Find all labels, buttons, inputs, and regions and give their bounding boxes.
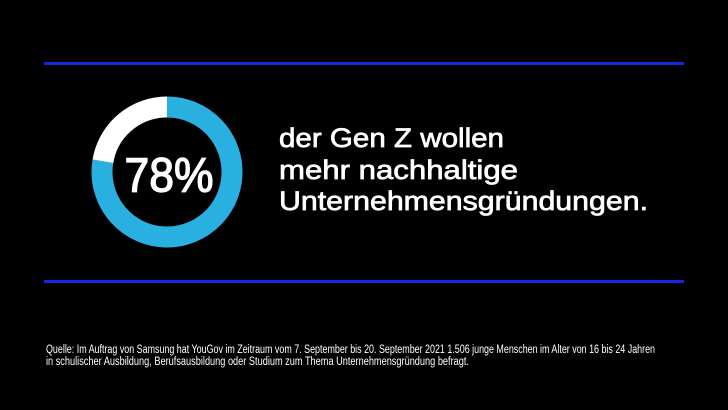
- donut chart: 78%: [102, 107, 232, 237]
- top blue rule: [44, 62, 684, 65]
- headline line 3: Unternehmensgründungen.: [279, 186, 648, 216]
- headline text: [279, 123, 648, 216]
- headline line 1: der Gen Z wollen: [279, 123, 504, 153]
- headline line 2: mehr nachhaltige: [279, 155, 518, 185]
- white segment: 22%: [103, 107, 167, 161]
- donut value: 78%: [124, 150, 214, 202]
- bottom blue rule: [44, 280, 684, 283]
- blue segment: 78%: [102, 107, 232, 237]
- source footnote: [46, 344, 655, 368]
- footnote line 2: in schulischer Ausbildung, Berufsausbildung oder Studium zum Thema Unternehmensgründung befragt.: [46, 356, 469, 368]
